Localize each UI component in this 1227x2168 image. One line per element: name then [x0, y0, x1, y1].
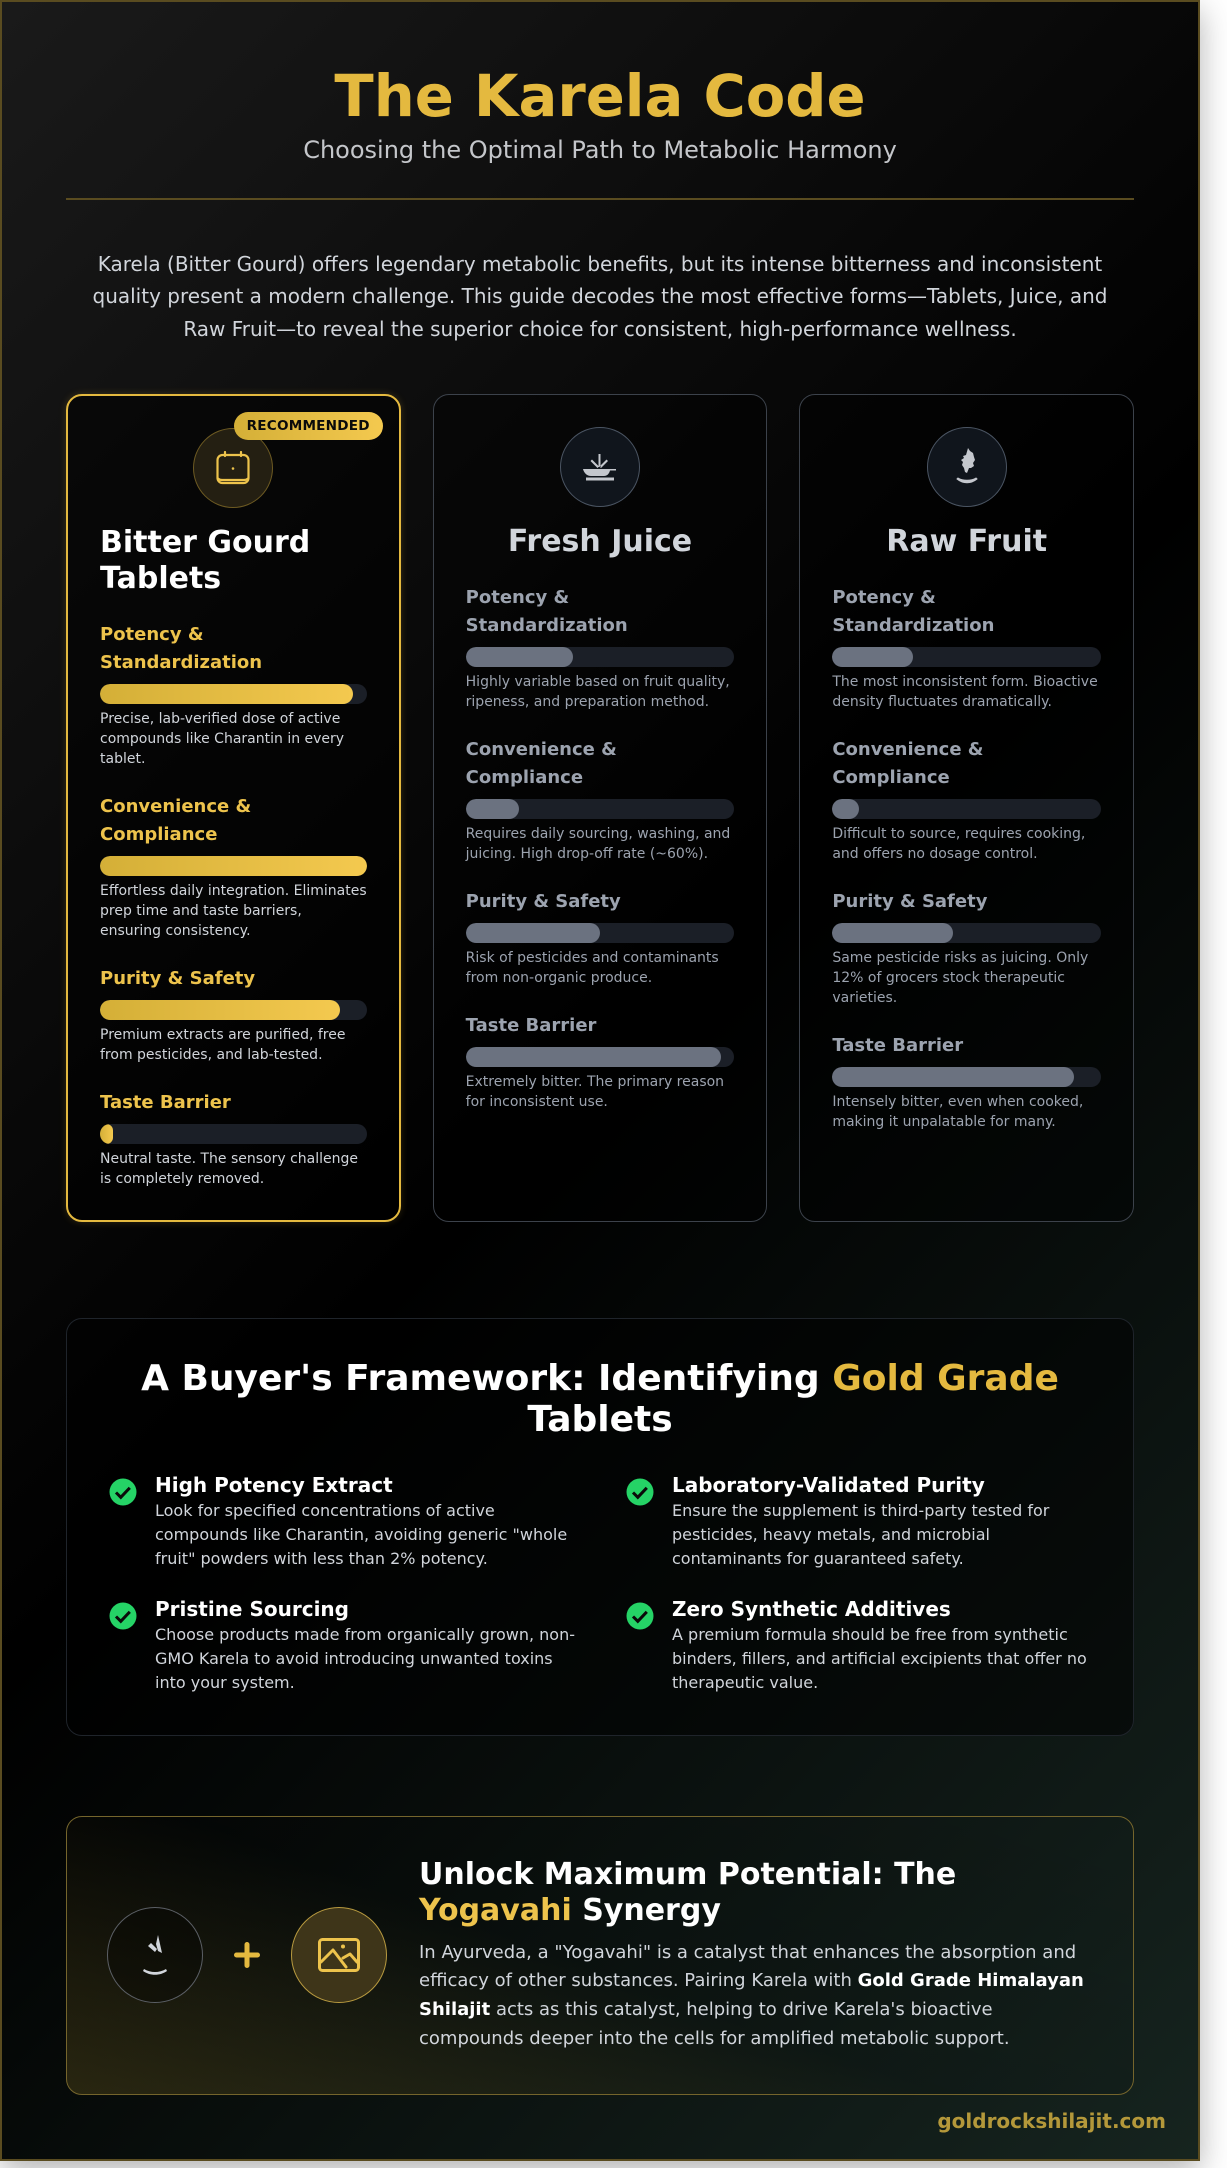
icon: shilajit circle: [291, 1907, 387, 2003]
metric: purity: Same pesticide risks as juicing. Only 12% of grocers stock therapeutic varieties.: [832, 950, 1088, 1006]
footer url: goldrockshilajit.com: [937, 2108, 1166, 2132]
metric: taste: Taste Barrier: [832, 1034, 963, 1056]
metric: potency: The most inconsistent form. Bioactive density fluctuates dramatically.: [832, 674, 1098, 710]
panel: buyer's framework: Ensure the supplement is third-party tested for pesticides, heavy metals, and microbial contaminants for guaranteed safety.: [672, 1501, 1049, 1568]
panel: buyer's framework: Pristine Sourcing: [155, 1596, 349, 1620]
panel: yogavahi synergy: [66, 1816, 1134, 2095]
icon: tablets calendar: [193, 428, 273, 508]
metric: potency: [100, 624, 367, 766]
panel: raw fruit: [799, 394, 1134, 1222]
metric: taste: [100, 1092, 367, 1186]
subtitle: Choosing the Optimal Path to Metabolic Harmony: [303, 136, 897, 164]
metric: purity: Premium extracts are purified, free from pesticides, and lab-tested.: [100, 1026, 345, 1062]
intro text: Karela (Bitter Gourd) offers legendary metabolic benefits, but its intense bitterness and inconsistent quality present a modern challenge. This guide decodes the most effective forms—Tablets, Juice, and Raw Fruit—to reveal the superior choice for consistent, high-performance wellness.: [92, 252, 1107, 341]
metric: taste: Taste Barrier: [466, 1014, 596, 1036]
heading: Fresh Juice: [508, 524, 692, 558]
icon: raw fruit: [927, 427, 1007, 507]
item: high potency extract: [110, 1472, 567, 1568]
panel: buyer's framework: Choose products made from organically grown, non-GMO Karela to avoid introducing unwanted toxins into your system.: [155, 1625, 575, 1692]
icon: karela circle: [107, 1907, 203, 2003]
metric: purity: [466, 890, 734, 986]
panel: buyer's framework: Look for specified concentrations of active compounds like Charantin, avoiding generic "whole fruit" powders with less than 2% potency.: [155, 1501, 567, 1568]
metric: convenience: Effortless daily integration. Eliminates prep time and taste barriers, ensuring consistency.: [100, 882, 367, 938]
framework heading: A Buyer's Framework: Identifying Gold Grade Tablets: [141, 1358, 1059, 1440]
metric: taste: [466, 1014, 734, 1110]
panel: buyer's framework: A premium formula should be free from synthetic binders, fillers, and artificial excipients that offer no therapeutic value.: [672, 1625, 1087, 1692]
metric: convenience: Convenience & Compliance: [100, 796, 251, 844]
metric: convenience: [832, 738, 1101, 862]
metric: purity: Purity & Safety: [466, 890, 621, 912]
metric: purity: Risk of pesticides and contaminants from non-organic produce.: [466, 950, 719, 986]
metric: potency: Potency & Standardization: [832, 586, 994, 636]
metric: potency: [466, 586, 734, 710]
metric: potency: Potency & Standardization: [466, 586, 628, 636]
metric: convenience: [100, 796, 367, 938]
heading: Bitter Gourd Tablets: [100, 524, 310, 596]
item: pristine sourcing: [110, 1596, 575, 1692]
synergy heading: Unlock Maximum Potential: The Yogavahi Synergy: [419, 1856, 956, 1928]
synergy text: In Ayurveda, a "Yogavahi" is a catalyst that enhances the absorption and efficacy of other substances. Pairing Karela with Gold Grade Himalayan Shilajit acts as this catalyst, helping to drive Karela's bioactive compounds deeper into the cells for amplified metabolic support.: [419, 1942, 1084, 2049]
panel: bitter gourd tablets: [66, 394, 401, 1222]
plus sign: [234, 1942, 260, 1968]
metric: taste: [832, 1034, 1101, 1130]
metric: taste: Intensely bitter, even when cooked, making it unpalatable for many.: [832, 1094, 1083, 1130]
panel: fresh juice: [433, 394, 767, 1222]
panel: buyer's framework: Zero Synthetic Additives: [672, 1596, 951, 1620]
recommended badge: RECOMMENDED: [247, 418, 370, 434]
metric: potency: Highly variable based on fruit quality, ripeness, and preparation method.: [466, 674, 730, 710]
metric: convenience: [465, 738, 734, 862]
panel: buyer's framework: Laboratory-Validated Purity: [672, 1472, 985, 1496]
metric: taste: Taste Barrier: [100, 1092, 231, 1112]
metric: purity: Purity & Safety: [100, 968, 255, 988]
panel: buyer's framework: [66, 1318, 1134, 1736]
metric: potency: Precise, lab-verified dose of active compounds like Charantin in every tablet.: [100, 710, 344, 766]
item: laboratory-validated purity: [626, 1472, 1050, 1568]
metric: convenience: Requires daily sourcing, washing, and juicing. High drop-off rate (~60%).: [466, 826, 730, 862]
metric: taste: Extremely bitter. The primary reason for inconsistent use.: [466, 1074, 724, 1110]
title: The Karela Code: [334, 63, 866, 130]
metric: purity: [100, 968, 367, 1062]
metric: taste: Neutral taste. The sensory challenge is completely removed.: [100, 1150, 358, 1186]
metric: convenience: Difficult to source, requires cooking, and offers no dosage control.: [832, 826, 1085, 862]
recommended badge: [234, 412, 383, 440]
item: zero synthetic additives: [626, 1596, 1087, 1692]
panel: buyer's framework: High Potency Extract: [155, 1472, 393, 1496]
heading: Raw Fruit: [886, 524, 1047, 558]
metric: potency: Potency & Standardization: [100, 624, 262, 672]
metric: purity: [832, 890, 1101, 1006]
metric: potency: [832, 586, 1101, 710]
icon: juice: [560, 427, 640, 507]
metric: convenience: Convenience & Compliance: [466, 738, 617, 788]
metric: convenience: Convenience & Compliance: [832, 738, 984, 788]
metric: purity: Purity & Safety: [832, 890, 987, 912]
